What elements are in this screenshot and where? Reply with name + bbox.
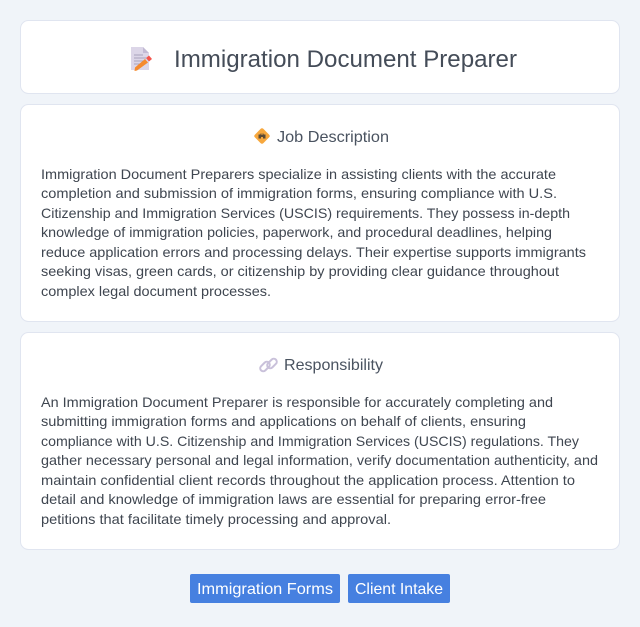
text block: responsibility: compliance with U.S. Citizenship and Immigration Services (USCIS) regulations. They bbox=[41, 433, 579, 449]
panel: job description bbox=[20, 104, 620, 322]
text block: responsibility: submitting immigration forms and applications on behalf of clients, ensuring bbox=[41, 413, 526, 429]
text block: responsibility: petitions that facilitate timely processing and approval. bbox=[41, 511, 391, 527]
tag: Client Intake: Client Intake bbox=[355, 581, 443, 598]
heading: job description: Job Description bbox=[277, 129, 389, 146]
tag: Immigration Forms: Immigration Forms bbox=[197, 581, 333, 598]
icon: document with pencil bbox=[131, 47, 152, 71]
text block: responsibility bbox=[41, 394, 598, 527]
text block: responsibility: maintain confidential client records throughout the application process. Attention to bbox=[41, 472, 575, 488]
text block: responsibility: gather necessary personal and legal information, verify documentation authenticity, and bbox=[41, 452, 598, 468]
tag: Immigration Forms bbox=[190, 574, 340, 603]
text block: responsibility: detail and knowledge of immigration laws are essential for preparing error-free bbox=[41, 491, 546, 507]
text block: job description bbox=[41, 166, 586, 299]
heading: responsibility: Responsibility bbox=[284, 357, 383, 374]
tag: Client Intake bbox=[348, 574, 450, 603]
text block: responsibility: An Immigration Document Preparer is responsible for accurately completing and bbox=[41, 394, 553, 410]
header panel bbox=[20, 20, 620, 94]
panel: responsibility bbox=[20, 332, 620, 550]
title: Immigration Document Preparer bbox=[174, 46, 517, 73]
icon: chain link bbox=[259, 357, 278, 373]
text block: job description: complex legal document processes. bbox=[41, 283, 271, 299]
text block: job description: Citizenship and Immigration Services (USCIS) requirements. They possess in-depth bbox=[41, 205, 570, 221]
text block: job description: Immigration Document Preparers specialize in assisting clients with the accurate bbox=[41, 166, 556, 182]
text block: job description: knowledge of immigration policies, paperwork, and procedural deadlines, helping bbox=[41, 224, 552, 240]
text block: job description: seeking visas, green cards, or citizenship by providing clear guidance throughout bbox=[41, 263, 559, 279]
text block: job description: reduce application errors and processing delays. Their expertise supports immigrants bbox=[41, 244, 586, 260]
icon: diamond sign bbox=[254, 128, 270, 144]
text block: job description: completion and submission of immigration forms, ensuring compliance with U.S. bbox=[41, 185, 557, 201]
